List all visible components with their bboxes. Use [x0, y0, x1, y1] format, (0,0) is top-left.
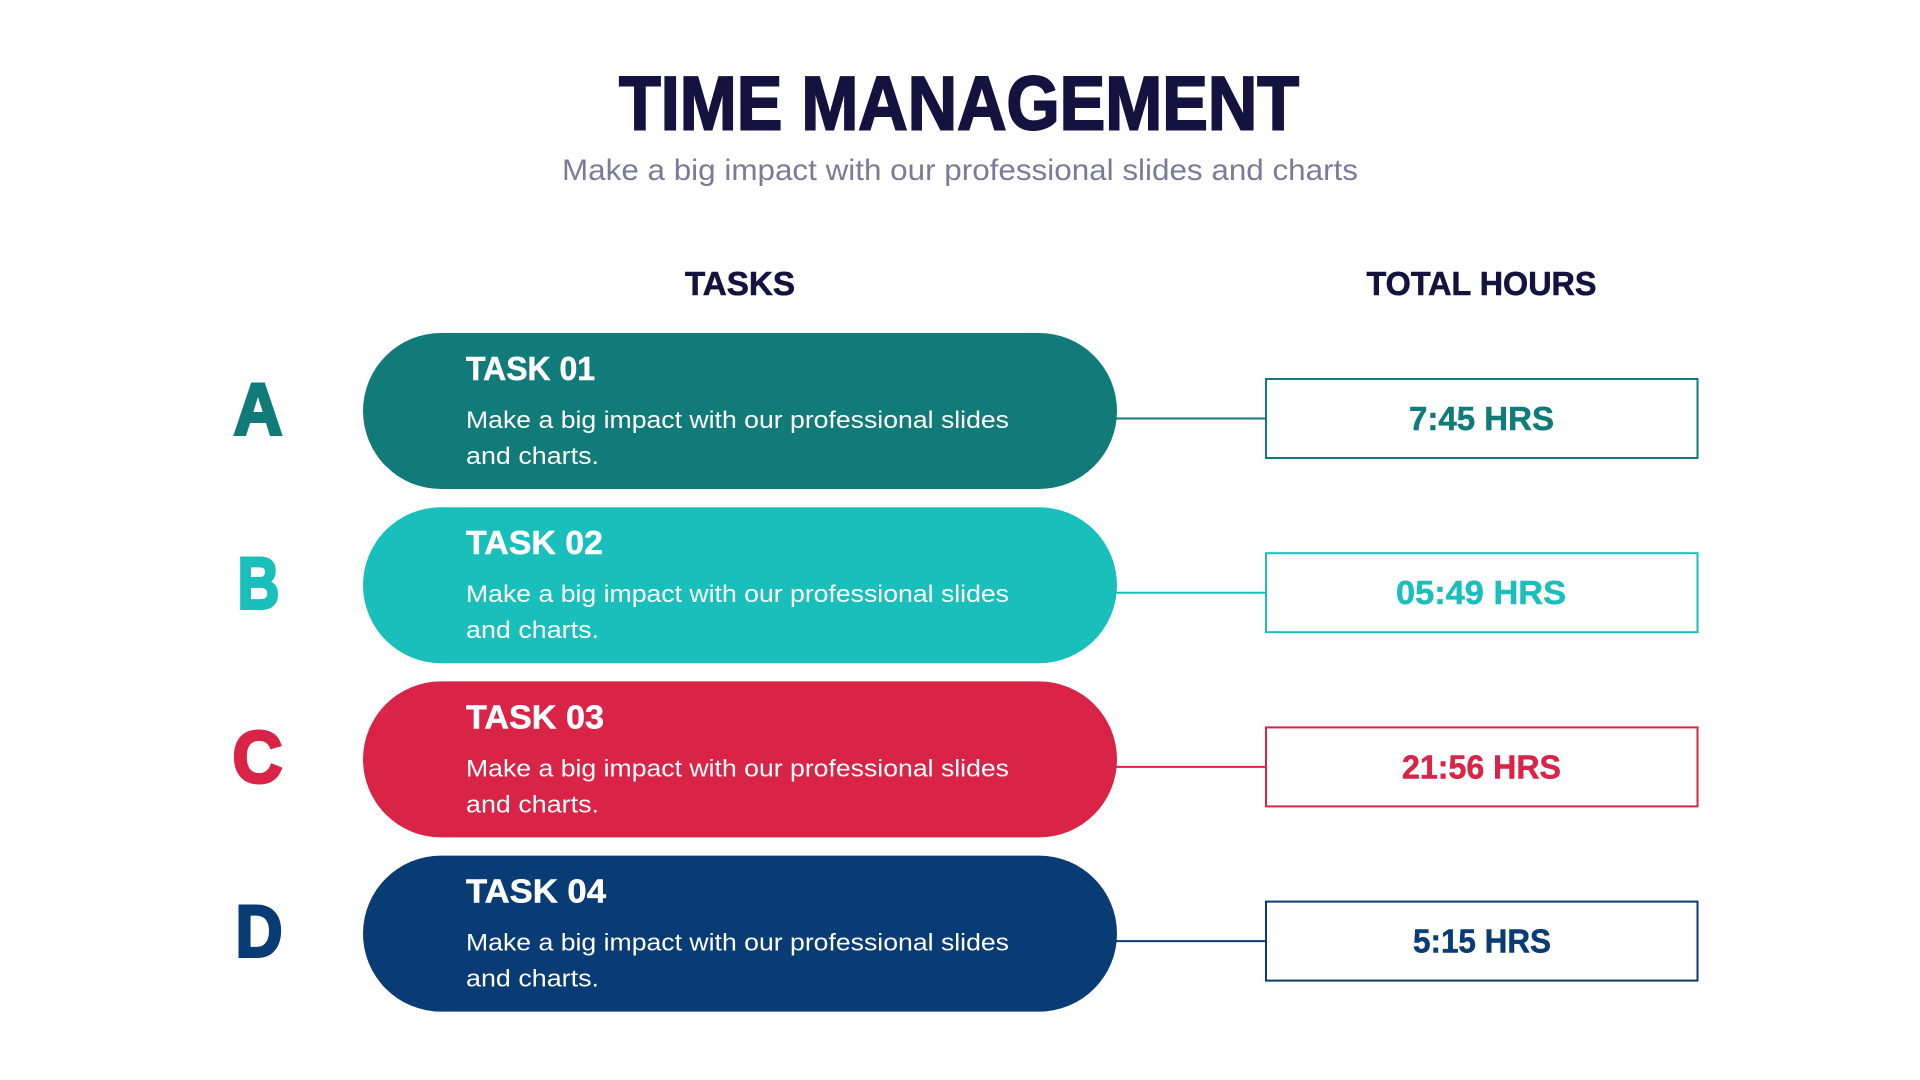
hours value A: 7:45 HRS [1409, 400, 1554, 437]
task 02 description: Make a big impact with our professional slides [466, 581, 1009, 608]
letter C: C [232, 718, 282, 798]
task 02 description [466, 581, 1009, 644]
pill: task 01 [363, 333, 1117, 489]
task 03 description: Make a big impact with our professional slides [466, 755, 1009, 782]
task 04 description [466, 930, 1009, 993]
pill: task 03 [363, 681, 1117, 837]
hours box A [1266, 379, 1698, 458]
pill: task 04 [363, 856, 1117, 1012]
letter D: D [236, 892, 282, 972]
pill: task 02 [363, 507, 1117, 663]
hours box D [1266, 902, 1698, 981]
letter A: A [234, 370, 282, 450]
task 03 description [466, 755, 1009, 818]
row B: task 02 [238, 507, 1698, 663]
task 04 description: and charts. [466, 966, 599, 993]
connector line B [1110, 592, 1266, 594]
task 01 description: Make a big impact with our professional slides [466, 407, 1009, 434]
task 02 heading: TASK 02 [466, 524, 603, 561]
column heading: tasks: TASKS [685, 265, 795, 302]
row D: task 04 [236, 856, 1698, 1012]
column heading: total hours: TOTAL HOURS [1366, 265, 1596, 302]
task 01 description [466, 407, 1009, 470]
task 04 heading: TASK 04 [466, 873, 607, 910]
hours value C: 21:56 HRS [1402, 748, 1561, 785]
task 01 description: and charts. [466, 443, 599, 470]
task 01 heading: TASK 01 [466, 350, 595, 387]
hours value B: 05:49 HRS [1396, 574, 1566, 611]
hours box B [1266, 553, 1698, 632]
task 03 heading: TASK 03 [466, 698, 604, 735]
connector line D [1110, 940, 1266, 942]
row A: task 01 [234, 333, 1698, 489]
connector line C [1110, 766, 1266, 768]
subtitle: Make a big impact with our professional slides and charts [562, 154, 1358, 187]
hours value D: 5:15 HRS [1413, 923, 1551, 960]
connector line A [1110, 418, 1266, 420]
row C: task 03 [232, 681, 1698, 837]
task 03 description: and charts. [466, 791, 599, 818]
letter B: B [238, 544, 280, 624]
task 02 description: and charts. [466, 617, 599, 644]
task 04 description: Make a big impact with our professional slides [466, 930, 1009, 957]
title: TIME MANAGEMENT [619, 62, 1299, 146]
hours box C [1266, 727, 1698, 806]
